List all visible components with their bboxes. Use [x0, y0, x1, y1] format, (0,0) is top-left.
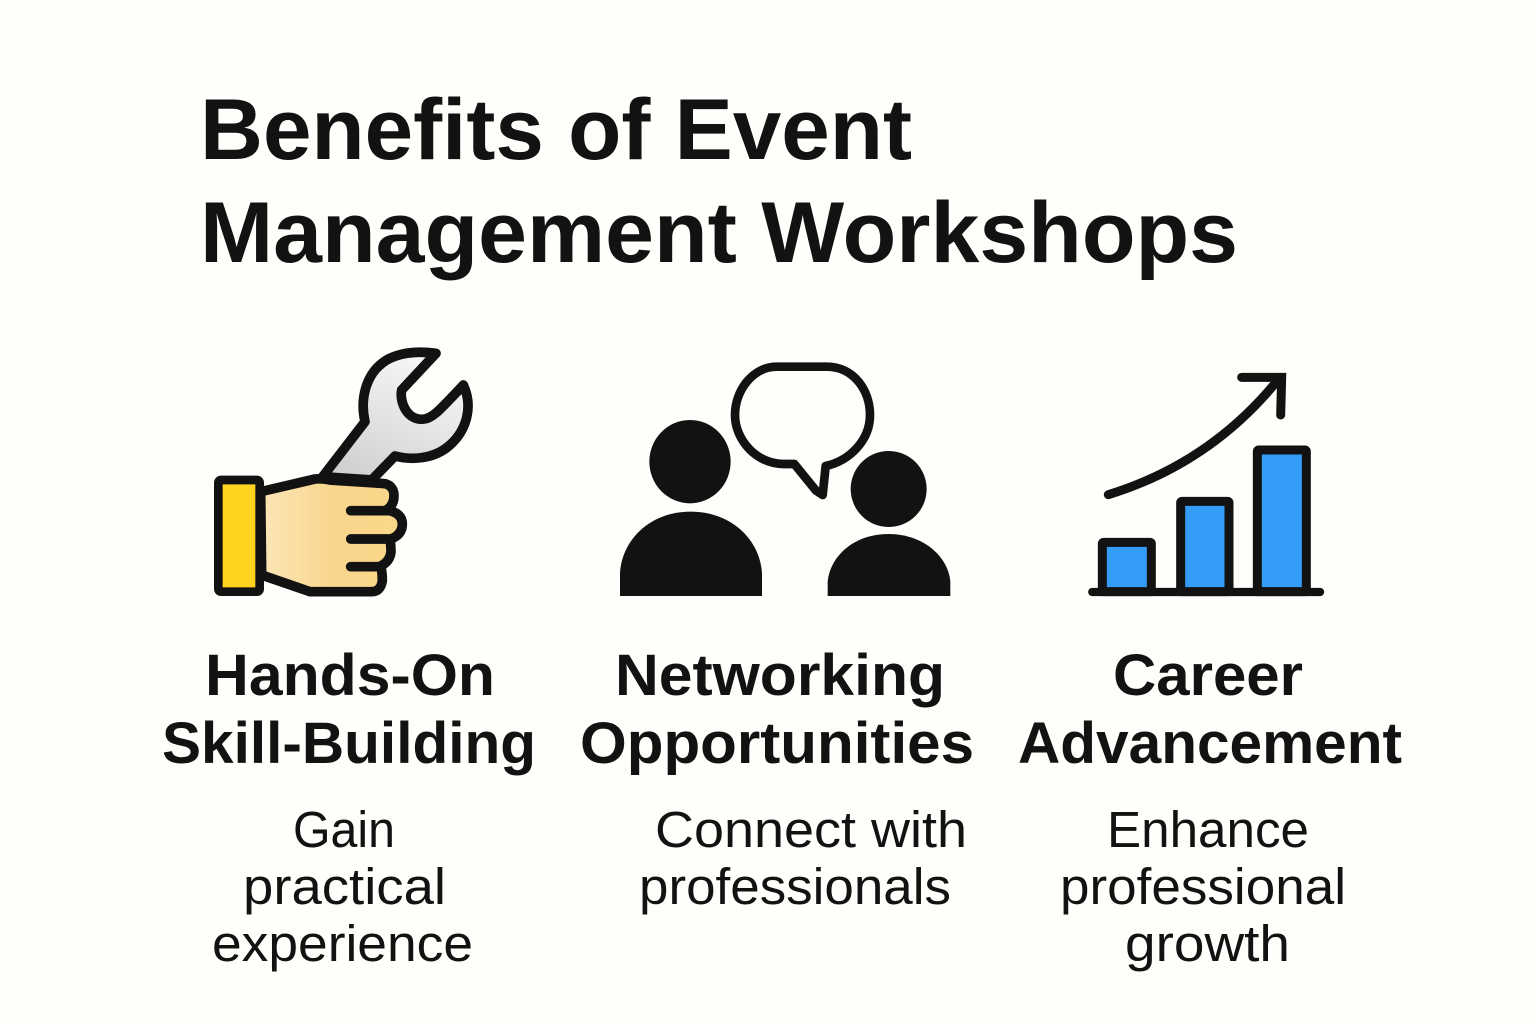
description: professional: [1060, 858, 1346, 915]
title: [200, 82, 1238, 281]
bar chart: [1092, 450, 1320, 592]
icon: rising bar chart with arrow: [1092, 377, 1320, 592]
description: professionals: [639, 858, 951, 915]
description: practical: [243, 858, 446, 915]
heading: [1018, 643, 1402, 776]
title: Management Workshops: [200, 185, 1238, 281]
speech bubble: [735, 367, 870, 495]
panel: hands-on skill-building: [162, 352, 536, 972]
heading: [162, 643, 536, 776]
arrow: [1108, 377, 1282, 495]
panel: career advancement: [1018, 377, 1402, 972]
heading: Opportunities: [580, 711, 974, 776]
panel: networking opportunities: [580, 367, 974, 915]
description: [639, 801, 967, 915]
description: experience: [212, 915, 473, 972]
heading: [580, 643, 974, 776]
heading: Advancement: [1018, 711, 1402, 776]
description: [1060, 801, 1346, 972]
description: Connect with: [655, 801, 967, 858]
description: [212, 801, 473, 972]
description: growth: [1125, 915, 1290, 972]
heading: Networking: [615, 643, 945, 708]
description: Gain: [293, 801, 395, 858]
heading: Skill-Building: [162, 711, 536, 776]
heading: Hands-On: [205, 643, 495, 708]
person: right: [828, 451, 950, 596]
icon: two people with speech bubble: [620, 367, 950, 596]
description: Enhance: [1107, 801, 1309, 858]
icon: hand holding wrench: [218, 352, 468, 592]
person: left: [620, 420, 762, 596]
title: Benefits of Event: [200, 82, 912, 178]
heading: Career: [1113, 643, 1303, 708]
